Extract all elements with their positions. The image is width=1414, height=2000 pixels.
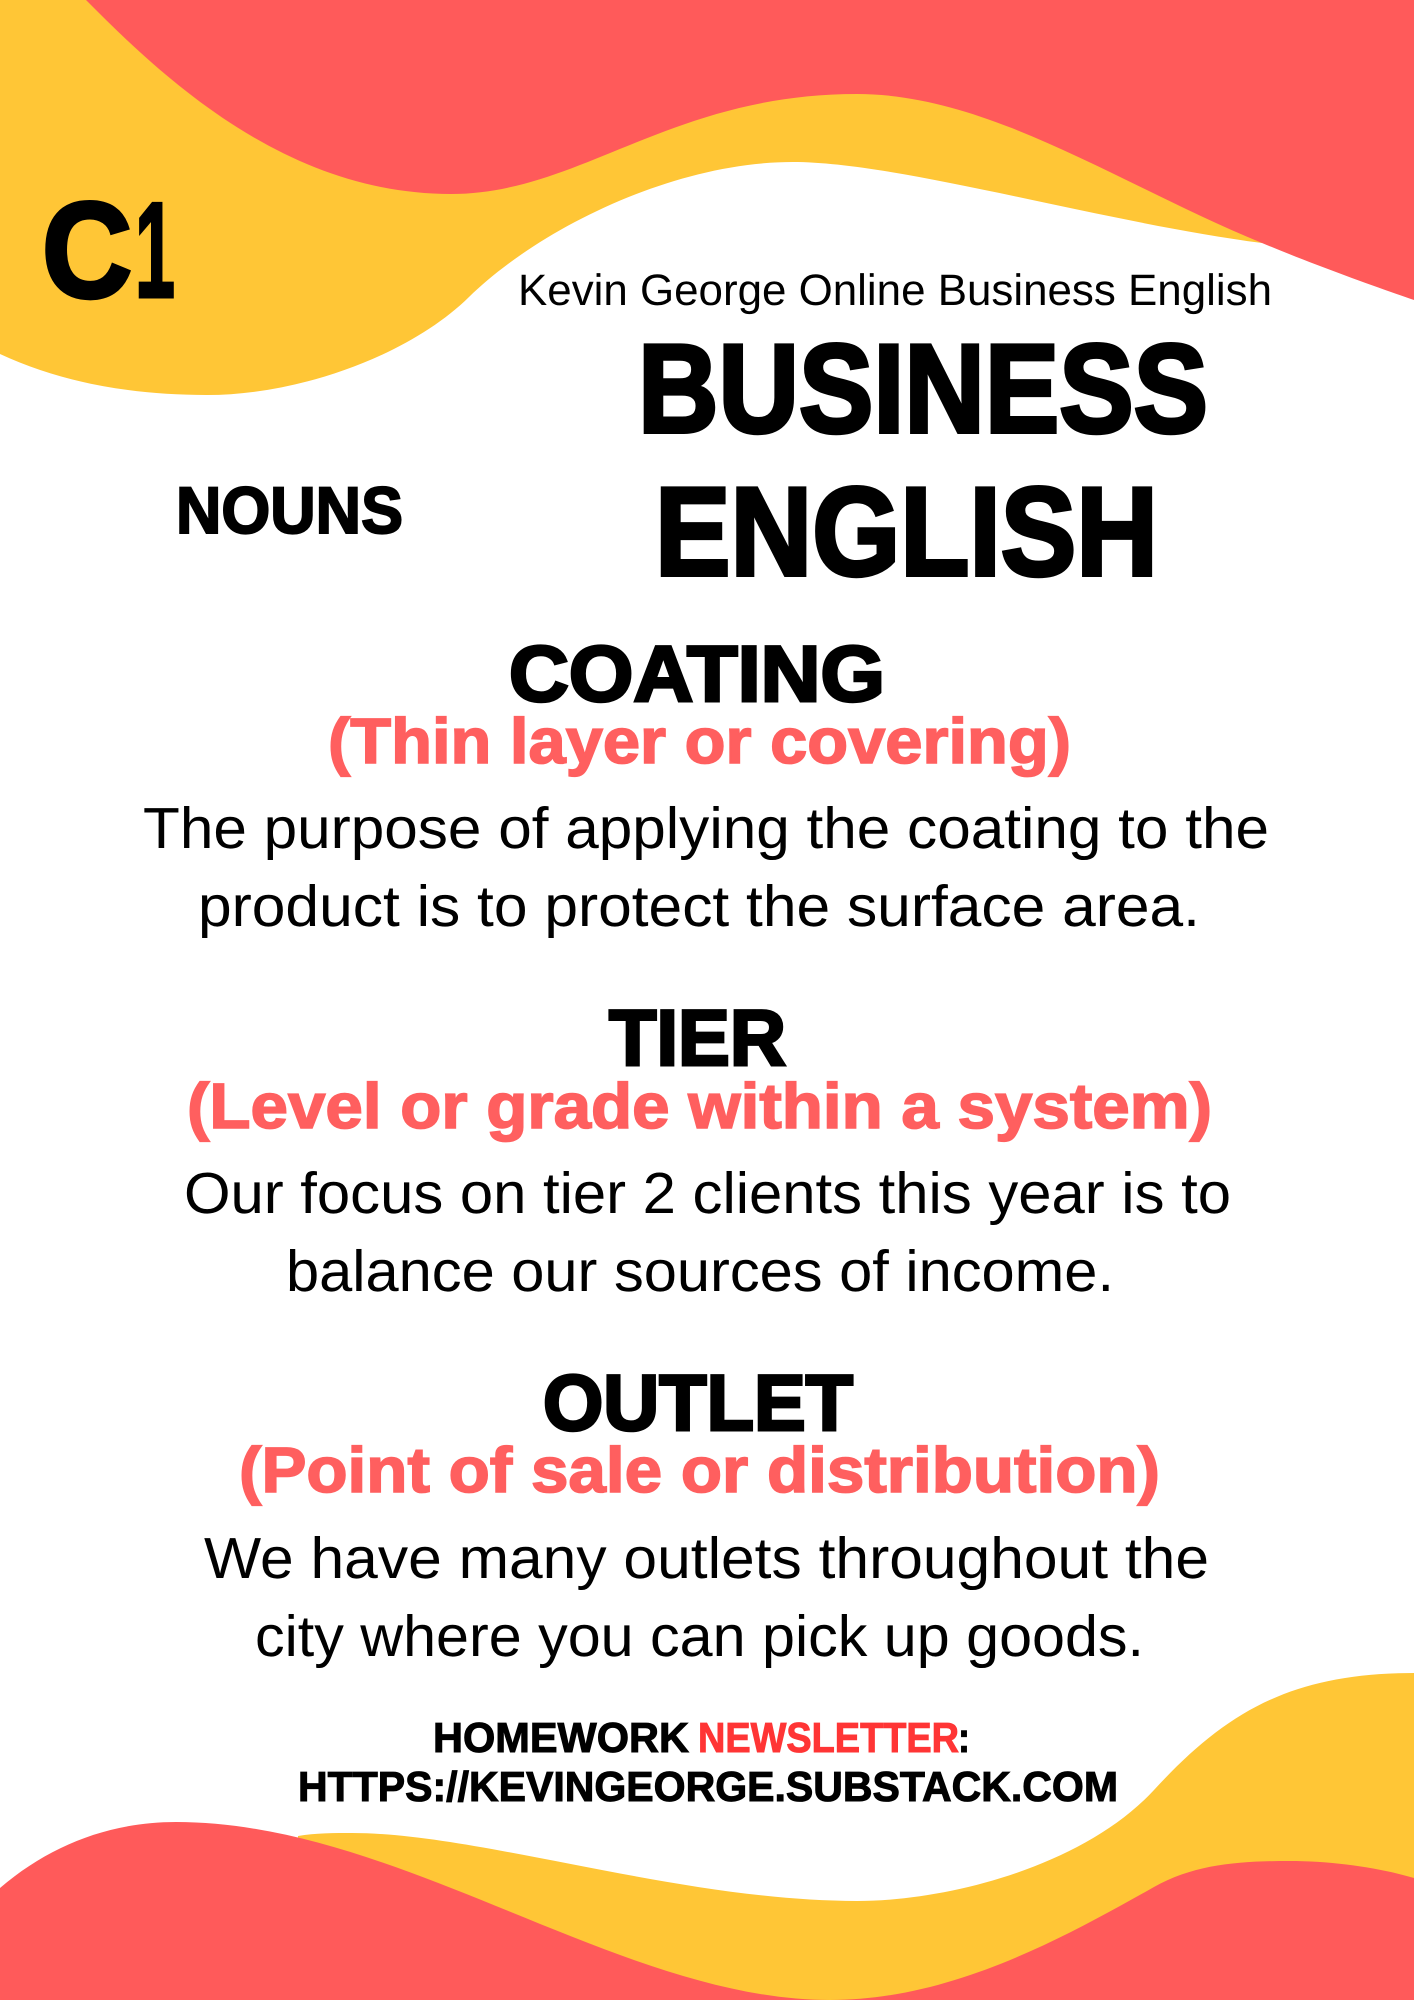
top yellow wave bbox=[0, 0, 1262, 395]
example sentence: tier: balance our sources of income. bbox=[286, 1239, 1114, 1304]
example sentence: outlet: We have many outlets throughout the bbox=[204, 1526, 1209, 1591]
definition: tier: (Level or grade within a system) bbox=[187, 1070, 1212, 1142]
homework newsletter callout: : bbox=[958, 1714, 970, 1761]
definition: coating: (Thin layer or covering) bbox=[328, 705, 1071, 777]
main title: ENGLISH bbox=[655, 461, 1158, 602]
category label: nouns: NOUNS bbox=[176, 473, 403, 547]
example sentence: tier: Our focus on tier 2 clients this year is to bbox=[184, 1161, 1231, 1226]
homework newsletter callout bbox=[298, 1714, 1118, 1810]
homework newsletter callout: HOMEWORK bbox=[433, 1714, 689, 1761]
example sentence: outlet bbox=[204, 1526, 1209, 1669]
example sentence: coating: The purpose of applying the coating to the bbox=[143, 796, 1269, 861]
example sentence: outlet: city where you can pick up goods. bbox=[255, 1604, 1144, 1669]
example sentence: coating bbox=[143, 796, 1269, 939]
main title: BUSINESS bbox=[638, 318, 1208, 459]
definition: outlet: (Point of sale or distribution) bbox=[239, 1434, 1160, 1506]
level badge: C1: 1 bbox=[135, 174, 175, 326]
panel: tier bbox=[184, 993, 1231, 1304]
level badge: C1: C bbox=[42, 174, 132, 326]
homework newsletter callout: NEWSLETTER bbox=[698, 1714, 959, 1761]
homework newsletter callout: HTTPS://KEVINGEORGE.SUBSTACK.COM bbox=[298, 1763, 1118, 1810]
panel: outlet bbox=[204, 1358, 1209, 1669]
heading: tier: TIER bbox=[609, 993, 786, 1082]
bottom red wave bbox=[0, 1822, 1414, 2000]
example sentence: tier bbox=[184, 1161, 1231, 1304]
author line: Kevin George Online Business English bbox=[518, 266, 1272, 315]
top red wave bbox=[86, 0, 1414, 300]
heading: coating: COATING bbox=[509, 629, 885, 718]
bottom yellow wave bbox=[298, 1673, 1414, 2000]
example sentence: coating: product is to protect the surface area. bbox=[198, 874, 1200, 939]
main title bbox=[638, 318, 1208, 602]
panel: coating bbox=[143, 629, 1269, 939]
heading: outlet: OUTLET bbox=[543, 1358, 853, 1447]
